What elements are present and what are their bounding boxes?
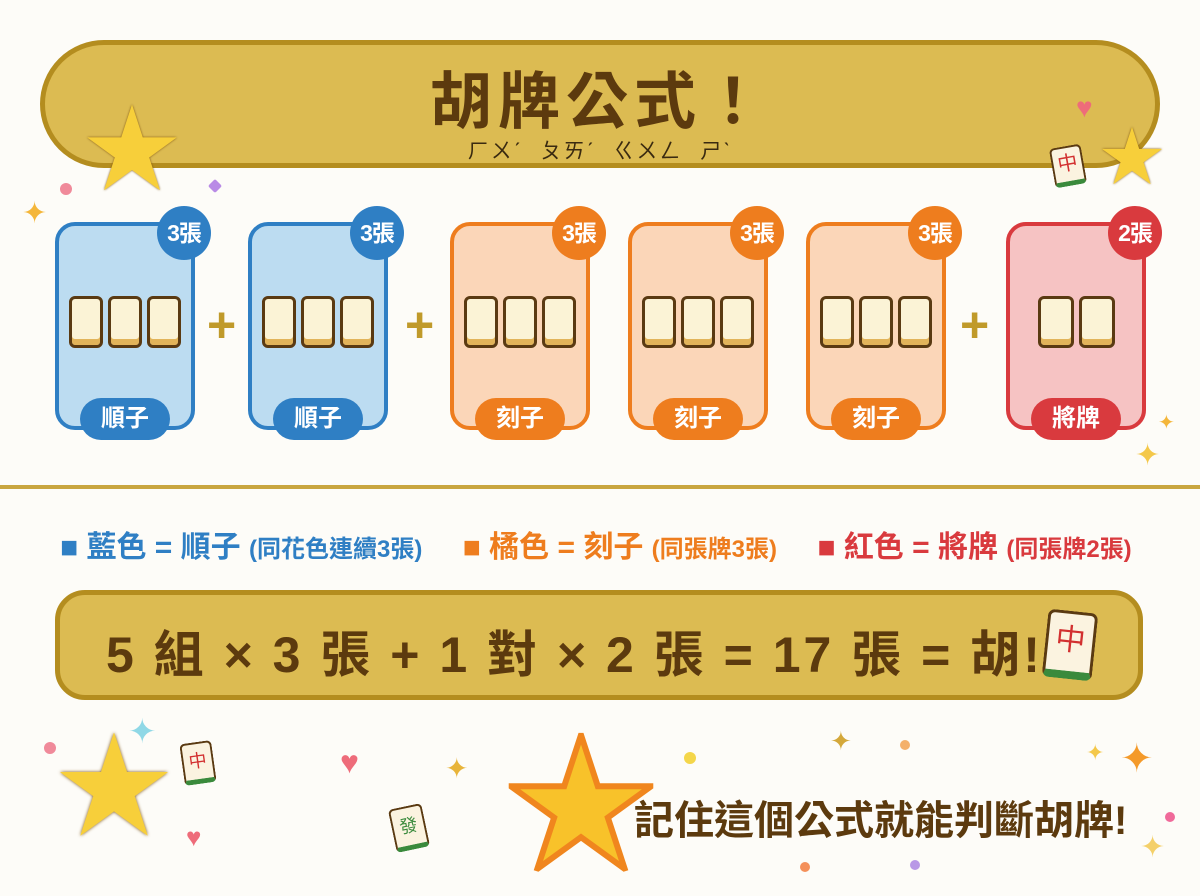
card: 刻子 1: 刻子 bbox=[496, 405, 544, 432]
text: ✦ bbox=[1120, 737, 1154, 781]
icon: 中 tile bbox=[1042, 609, 1098, 681]
text: ✦ bbox=[1135, 439, 1160, 472]
icon: star mascot top-left: ★ bbox=[84, 98, 180, 205]
card: 順子 2: 3張 bbox=[360, 220, 394, 246]
icon: mahjong tile top-right: 中 bbox=[1056, 151, 1079, 177]
card: 順子 2 bbox=[248, 222, 388, 430]
card: 刻子 1 bbox=[450, 222, 590, 430]
icon: heart: ♥ bbox=[1076, 92, 1093, 123]
card: 將牌: 2張 bbox=[1118, 220, 1152, 246]
card: 順子 1: 順子 bbox=[101, 405, 149, 432]
formula banner bbox=[55, 590, 1143, 700]
sparkles: ✦ bbox=[22, 197, 47, 230]
icon: bottom-left star mascot: ★ bbox=[56, 723, 172, 853]
plus 3: + bbox=[960, 297, 989, 353]
legend: ■ 藍色 = 順子 (同花色連續3張) ■ 橘色 = 刻子 (同張牌3張) ■ 紅色 = 將牌 (同張牌2張) bbox=[60, 531, 1132, 564]
text: ✦ bbox=[1158, 412, 1175, 434]
title text: 胡牌公式！ bbox=[430, 68, 770, 137]
card: 順子 2: 順子 bbox=[294, 405, 342, 432]
text: ✦ bbox=[445, 753, 468, 784]
text: ✦ bbox=[1140, 831, 1165, 864]
icon: 發 tile: 發 bbox=[398, 814, 419, 838]
card: 將牌 bbox=[1006, 222, 1146, 430]
icon: mahjong tile top-right bbox=[1049, 144, 1087, 188]
text: ✦ bbox=[830, 726, 852, 756]
card: 將牌: 將牌 bbox=[1052, 405, 1100, 432]
card: 刻子 2: 刻子 bbox=[674, 405, 722, 432]
icon: hearts: ♥ bbox=[340, 744, 359, 780]
icon: 中 tile: 中 bbox=[1054, 623, 1087, 659]
card: 刻子 3 bbox=[806, 222, 946, 430]
icon: 中 tile bottom: 中 bbox=[187, 750, 208, 772]
card: 順子 1 bbox=[55, 222, 195, 430]
bopomofo: ㄏㄨˊ ㄆㄞˊ ㄍㄨㄥ ㄕˋ bbox=[468, 140, 732, 163]
card: 順子 1: 3張 bbox=[167, 220, 201, 246]
icon: sparkle cyan: ✦ bbox=[128, 713, 156, 751]
text: ♥ bbox=[186, 822, 201, 852]
card: 刻子 2 bbox=[628, 222, 768, 430]
card: 刻子 1: 3張 bbox=[562, 220, 596, 246]
title banner bbox=[40, 40, 1160, 168]
icon: 發 tile bbox=[388, 803, 430, 853]
plus 1: + bbox=[207, 297, 236, 353]
card: 刻子 2: 3張 bbox=[740, 220, 774, 246]
card: 刻子 3: 3張 bbox=[918, 220, 952, 246]
closing message: 記住這個公式就能判斷胡牌! bbox=[634, 799, 1127, 843]
icon: star mascot top-right: ★ bbox=[1100, 122, 1164, 194]
icon: 中 tile bottom bbox=[179, 740, 217, 786]
formula text: 5 組 × 3 張 + 1 對 × 2 張 = 17 張 = 胡! bbox=[106, 627, 1043, 683]
icon: big orange star: ★ bbox=[506, 723, 656, 891]
text: ✦ bbox=[1086, 740, 1104, 765]
plus 2: + bbox=[405, 297, 434, 353]
card: 刻子 3: 刻子 bbox=[852, 405, 900, 432]
